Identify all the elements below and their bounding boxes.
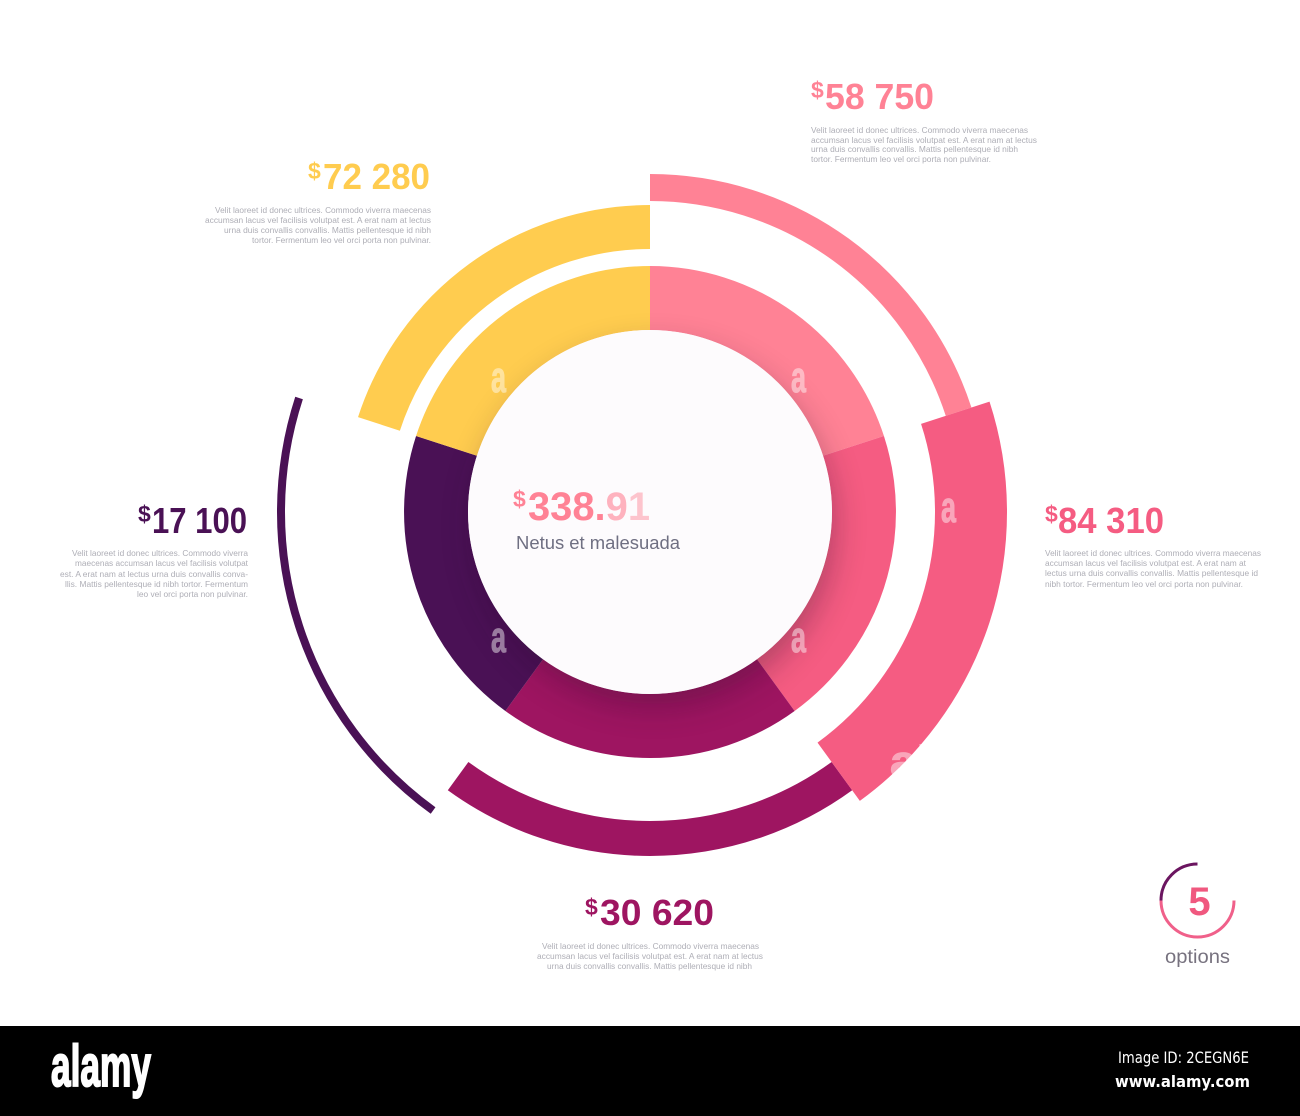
watermark marks: al xyxy=(890,737,930,786)
options badge: options xyxy=(1165,947,1230,968)
label: 30 620 xyxy=(537,892,763,971)
label: 17 100: llis. Mattis pellentesque id nibh tortor. Fermentum xyxy=(65,579,248,589)
outer arc: purple xyxy=(281,398,433,811)
label: 30 620: $ xyxy=(585,894,598,920)
label: 58 750: $ xyxy=(811,77,824,103)
label: 58 750: Velit laoreet id donec ultrices. Commodo viverra maecenas xyxy=(811,125,1028,135)
label: 84 310: lectus urna duis convallis convallis. Mattis pellentesque id xyxy=(1045,568,1258,578)
label: 17 100: $ xyxy=(138,501,151,527)
label: 58 750: accumsan lacus vel facilisis volutpat est. A erat nam at lectus xyxy=(811,135,1037,145)
outer arc: yellow xyxy=(379,227,650,424)
label: 17 100: leo vel orci porta non pulvinar. xyxy=(137,589,248,599)
outer arc: magenta xyxy=(458,776,842,838)
label: 17 100: est. A erat nam at lectus urna duis convallis conva- xyxy=(60,569,248,579)
label: 30 620: accumsan lacus vel facilisis volutpat est. A erat nam at lectus xyxy=(537,951,763,961)
website: www.alamy.com xyxy=(1115,1072,1250,1091)
label: 30 620: 30 620 xyxy=(600,892,714,933)
watermark marks: a xyxy=(491,353,506,402)
options badge: 5 xyxy=(1188,880,1211,924)
watermark marks: a xyxy=(941,483,956,532)
label: 84 310: accumsan lacus vel facilisis volutpat est. A erat nam at xyxy=(1045,558,1247,568)
label: 58 750: tortor. Fermentum leo vel orci porta non pulvinar. xyxy=(811,154,991,164)
watermark marks: a xyxy=(791,353,806,402)
label: 17 100: Velit laoreet id donec ultrices. Commodo viverra xyxy=(72,548,248,558)
outer arc: pink xyxy=(839,413,971,772)
label: 72 280: urna duis convallis convallis. Mattis pellentesque id nibh xyxy=(224,225,431,235)
label: 72 280: Velit laoreet id donec ultrices. Commodo viverra maecenas xyxy=(215,205,431,215)
label: 72 280: $ xyxy=(308,158,321,184)
center total xyxy=(513,485,681,553)
label: 72 280: accumsan lacus vel facilisis volutpat est. A erat nam at lectus xyxy=(205,215,431,225)
label: 30 620: Velit laoreet id donec ultrices. Commodo viverra maecenas xyxy=(542,941,759,951)
label: 17 100: 17 100 xyxy=(152,500,247,541)
label: 17 100: maecenas accumsan lacus vel facilisis volutpat xyxy=(75,558,249,568)
footer logo: alamy xyxy=(51,1034,151,1099)
label: 84 310: 84 310 xyxy=(1058,500,1164,541)
label: 58 750 xyxy=(811,76,1037,164)
label: 58 750: urna duis convallis convallis. Mattis pellentesque id nibh xyxy=(811,144,1018,154)
center total: $ xyxy=(513,486,526,512)
label: 84 310: $ xyxy=(1045,501,1058,527)
watermark marks xyxy=(491,353,956,786)
image id: Image ID: 2CEGN6E xyxy=(1118,1048,1249,1067)
inner ring segments xyxy=(436,298,864,726)
center total: 338.91 xyxy=(528,485,650,529)
label: 72 280 xyxy=(205,156,431,245)
options badge xyxy=(1161,864,1234,968)
donut chart xyxy=(281,188,971,838)
outer arc: light pink xyxy=(650,188,959,412)
label: 17 100 xyxy=(60,500,249,599)
label: 30 620: urna duis convallis convallis. Mattis pellentesque id nibh xyxy=(547,961,752,971)
label: 84 310 xyxy=(1045,500,1261,589)
label: 72 280: 72 280 xyxy=(323,156,430,197)
center circle xyxy=(468,330,832,694)
watermark marks: a xyxy=(791,613,806,662)
label: 58 750: 58 750 xyxy=(825,76,934,117)
center total: Netus et malesuada xyxy=(516,533,681,553)
label: 72 280: tortor. Fermentum leo vel orci porta non pulvinar. xyxy=(252,235,431,245)
center circle shadow xyxy=(476,348,832,704)
label: 84 310: Velit laoreet id donec ultrices. Commodo viverra maecenas xyxy=(1045,548,1261,558)
label: 84 310: nibh tortor. Fermentum leo vel orci porta non pulvinar. xyxy=(1045,579,1243,589)
footer bar xyxy=(0,1026,1300,1116)
watermark marks: a xyxy=(491,613,506,662)
